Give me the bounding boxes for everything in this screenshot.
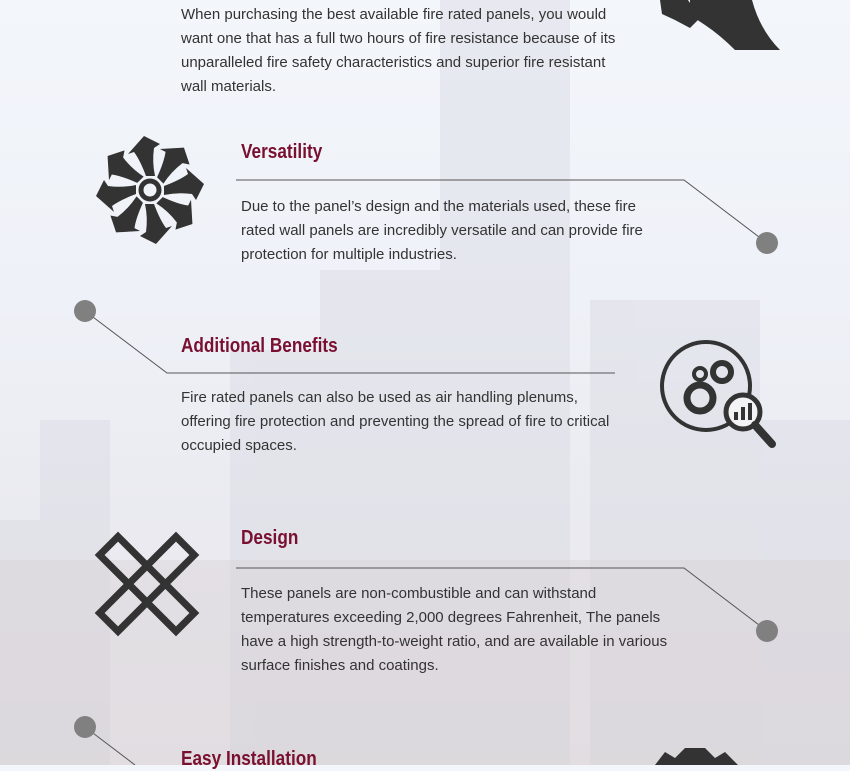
heading: Easy Installation: Easy Installation bbox=[181, 748, 317, 770]
heading: Versatility: Versatility bbox=[241, 141, 322, 163]
text: intro paragraph: When purchasing the best available fire rated panels, you would want one that has a full two hours of fire resistance because of its unparalleled fire safety characteristics and superior fire resistant wall materials. bbox=[181, 6, 615, 95]
heading: Design: Design bbox=[241, 527, 298, 549]
text: additional benefits: Fire rated panels can also be used as air handling plenums, offering fire protection and preventing the spread of fire to critical occupied spaces. bbox=[181, 389, 609, 454]
text: versatility: Due to the panel’s design and the materials used, these fire rated wall panels are incredibly versatile and can provide fire protection for multiple industries. bbox=[241, 198, 643, 263]
heading: Additional Benefits: Additional Benefits bbox=[181, 335, 338, 357]
text: design: These panels are non-combustible and can withstand temperatures exceeding 2,000 degrees Fahrenheit, The panels have a high strength-to-weight ratio, and are available in various surface finishes and coatings. bbox=[241, 585, 667, 674]
